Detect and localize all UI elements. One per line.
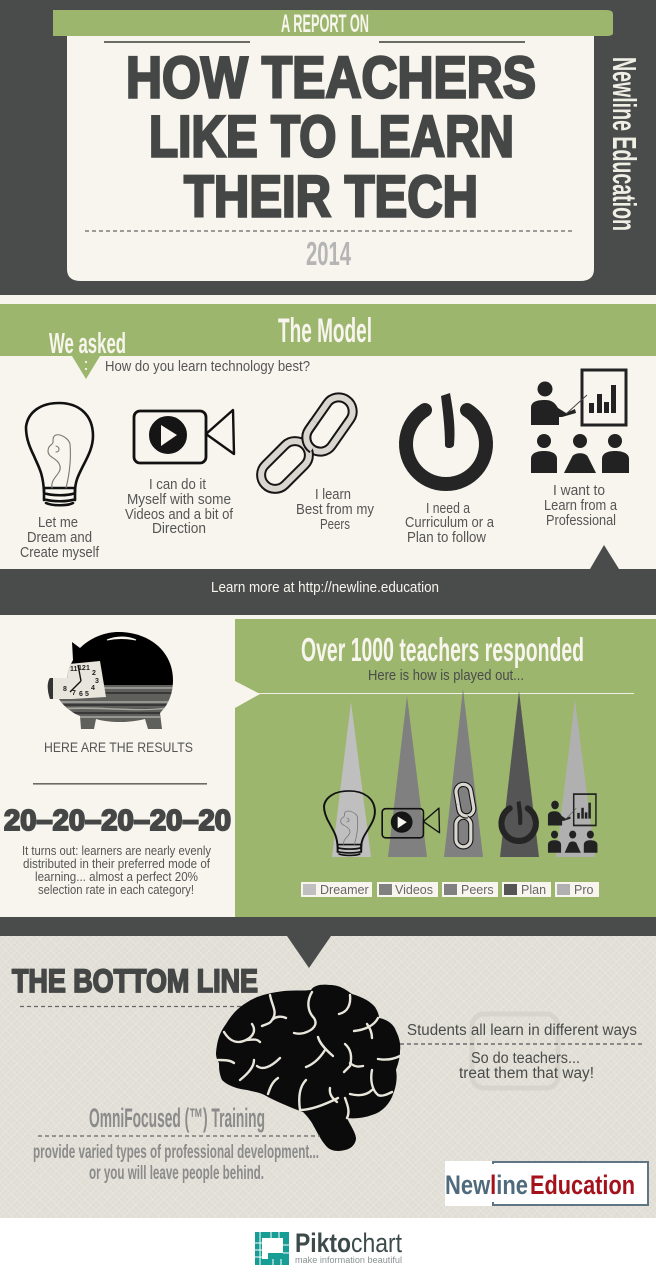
students text: So do teachers... [471, 1050, 580, 1067]
title: HOW TEACHERS [126, 46, 536, 111]
panel: responses [235, 619, 656, 917]
icon: piggy bank clock: 11 [70, 666, 78, 673]
report ribbon: A REPORT ON [281, 10, 369, 38]
results paragraph: selection rate in each category! [38, 882, 194, 897]
footer: piktochart: make information beautiful [295, 1255, 402, 1266]
title: LIKE TO LEARN [149, 105, 514, 170]
option: plan [405, 393, 495, 546]
option: videos: Myself with some [127, 491, 231, 508]
icon: piggy bank clock [48, 632, 173, 729]
big numbers: 20–20–20–20–20 [4, 805, 231, 837]
icon: piktochart logo [255, 1232, 289, 1265]
bottom line heading: THE BOTTOM LINE [12, 963, 258, 999]
chart icons [324, 777, 597, 855]
title [126, 46, 536, 230]
results paragraph [22, 843, 211, 897]
results paragraph: learning... almost a perfect 20% [35, 869, 198, 884]
icon: piggy bank clock: 6 [79, 691, 83, 698]
option: peers: Best from my [296, 501, 374, 518]
side label: Newline Education [606, 57, 643, 231]
option: dreamer: Let me [38, 514, 78, 531]
students text: Students all learn in different ways [407, 1022, 637, 1039]
results caption: HERE ARE THE RESULTS [44, 739, 193, 755]
option: plan: I need a [426, 500, 471, 517]
title: THEIR TECH [184, 165, 478, 230]
option: dreamer [20, 403, 100, 561]
option: plan: Curriculum or a [405, 514, 495, 531]
option: professional: Professional [546, 512, 616, 529]
responses subheading: Here is how is played out... [368, 668, 524, 684]
option: plan: Plan to follow [407, 529, 486, 546]
option: peers: I learn [315, 486, 351, 503]
footer: piktochart [0, 1218, 656, 1280]
panel: results [4, 625, 231, 897]
option: videos: Direction [152, 520, 206, 537]
report ribbon [53, 10, 613, 38]
legend [301, 882, 599, 897]
title card [67, 36, 594, 281]
logo: newline education: Newline [445, 1170, 528, 1200]
legend: Pro [574, 883, 594, 897]
legend: Videos [395, 883, 433, 897]
footer: piktochart: Piktochart [295, 1228, 402, 1258]
option: dreamer: Create myself [20, 544, 100, 561]
icon: piggy bank clock: 3 [95, 678, 99, 685]
icon: piggy bank clock: 4 [91, 685, 95, 692]
icon: piggy bank clock: 8 [63, 686, 67, 693]
option: videos [125, 410, 234, 537]
option: peers: Peers [320, 516, 350, 533]
option: professional [531, 370, 629, 529]
question: How do you learn technology best? [105, 358, 310, 375]
option: professional: Learn from a [544, 497, 618, 514]
icon: piggy bank clock: 2 [92, 670, 96, 677]
year: 2014 [306, 235, 351, 272]
legend: Plan [521, 883, 546, 897]
option: videos: Videos and a bit of [125, 506, 234, 523]
icon: piggy bank clock: 1 [86, 665, 90, 672]
legend: Peers [461, 883, 494, 897]
students text [407, 1022, 637, 1082]
training heading: OmniFocused (™) Training [89, 1103, 265, 1133]
results paragraph: distributed in their preferred mode of [23, 856, 210, 871]
training text [33, 1142, 319, 1184]
icon: piggy bank clock: 12 [78, 665, 86, 672]
icon: piggy bank clock: 5 [85, 691, 89, 698]
training text: provide varied types of professional development... [33, 1142, 319, 1163]
learn more band [0, 545, 656, 615]
model heading: The Model [278, 312, 372, 350]
students text: treat them that way! [459, 1065, 594, 1082]
learn more band: Learn more at http://newline.education [211, 579, 439, 596]
icon: piggy bank clock: 7 [72, 690, 76, 697]
option: videos: I can do it [149, 476, 207, 493]
panel: the model [0, 304, 656, 561]
training text: or you will leave people behind. [89, 1163, 264, 1184]
icon: brain [216, 985, 400, 1151]
option: peers [255, 392, 374, 533]
we asked tag [49, 328, 126, 379]
logo: newline education [445, 1161, 649, 1206]
option: professional: I want to [553, 482, 605, 499]
we asked tag: We asked [49, 328, 126, 360]
option: dreamer: Dream and [27, 529, 92, 546]
header band [0, 0, 656, 295]
legend: Dreamer [320, 883, 369, 897]
panel: bottom line [0, 917, 656, 1218]
triangle chart [332, 689, 595, 857]
results paragraph: It turns out: learners are nearly evenly [22, 843, 211, 858]
